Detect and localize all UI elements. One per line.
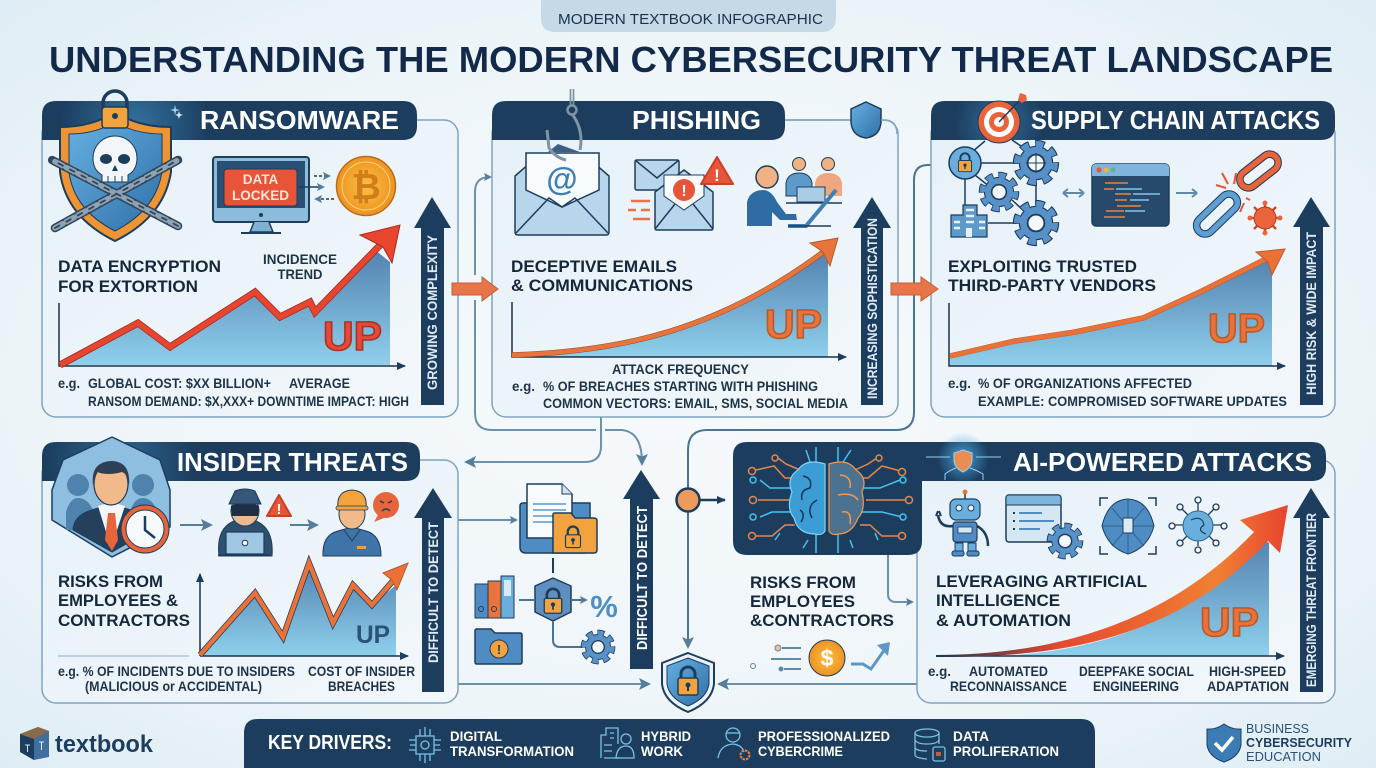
text: risks from employees and contractors centre: &CONTRACTORS	[750, 611, 894, 630]
heading: key drivers: KEY DRIVERS:	[268, 732, 392, 754]
text: supply chain examples: EXAMPLE: COMPROMISED SOFTWARE UPDATES	[978, 393, 1287, 409]
text: data encryption for extortion: DATA ENCRYPTION	[58, 257, 221, 276]
text: ai examples: HIGH-SPEED	[1209, 663, 1286, 679]
text: leveraging ai	[936, 572, 1147, 630]
arrow: code to broken link	[1176, 189, 1197, 197]
icon: bitcoin coin: ₿	[351, 166, 381, 207]
icon: lock shield with links	[519, 578, 586, 647]
icon: binders	[475, 576, 514, 618]
chart: ransomware incidence trend: TREND	[278, 266, 322, 282]
text: ai examples: DEEPFAKE SOCIAL	[1079, 663, 1194, 679]
text: leveraging ai: LEVERAGING ARTIFICIAL	[936, 572, 1147, 591]
icon: circuit brain	[748, 447, 912, 553]
text: ai examples: e.g.	[928, 663, 951, 679]
arrow: difficult to detect	[414, 488, 452, 692]
icon: gear	[584, 633, 612, 661]
text: supply chain examples: e.g.	[948, 375, 971, 391]
arrow: high risk and wide impact	[1293, 197, 1330, 405]
icon: envelope on fishing hook	[515, 89, 609, 235]
icon: virus	[1248, 200, 1282, 236]
text: ransomware examples	[58, 375, 409, 409]
icon: central shield lock	[662, 653, 714, 712]
text: risks from employees and contractors centre: RISKS FROM	[750, 573, 856, 592]
icon: documents and locked folder	[520, 484, 597, 553]
logo: textbook: textbook	[55, 731, 154, 758]
arrow: emerging threat frontier	[1293, 488, 1330, 692]
icon: cost trend with coin: $	[821, 645, 834, 671]
text: digital transformation	[450, 729, 574, 759]
icon: neural network sphere	[1169, 497, 1227, 553]
text: hybrid work	[641, 729, 691, 759]
icon: code window	[1092, 164, 1169, 226]
heading: ai-powered attacks: AI-POWERED ATTACKS	[1013, 447, 1312, 477]
panel: phishing	[492, 89, 898, 417]
text: ai examples: ADAPTATION	[1207, 678, 1289, 694]
text: risks from employees: EMPLOYEES &	[58, 591, 178, 610]
icon: alert emails: !	[681, 183, 687, 200]
panel: insider threats	[41, 436, 459, 704]
chart: attack frequency	[512, 238, 846, 377]
icon: glowing shield	[926, 432, 1001, 484]
arrow: increasing sophistication	[853, 197, 891, 405]
chart: ai attack growth	[936, 505, 1288, 657]
badge: modern textbook infographic	[541, 0, 836, 32]
text: supply chain examples	[948, 375, 1287, 409]
text: insider examples: (MALICIOUS or ACCIDENTAL)	[85, 678, 262, 694]
arrow: phishing to supply chain	[891, 277, 938, 301]
icon: data locked monitor	[213, 157, 334, 233]
panel: supply chain attacks	[931, 77, 1335, 417]
chart: attack frequency: UP	[765, 301, 822, 347]
chart: supply chain trend	[949, 249, 1285, 366]
icon: database	[915, 729, 945, 761]
arrow: employee to hacker	[180, 524, 210, 526]
icon: hacker with laptop	[218, 489, 272, 556]
icon: alert emails: !	[714, 166, 720, 185]
text: deceptive emails: & COMMUNICATIONS	[511, 276, 693, 295]
chart: insider incidents: UP	[356, 621, 390, 649]
icon: robot	[936, 490, 988, 556]
icon: percent sign: %	[590, 589, 618, 624]
text: leveraging ai: INTELLIGENCE	[936, 591, 1060, 610]
text: ransomware examples: AVERAGE	[289, 375, 350, 391]
chart: ransomware incidence trend	[59, 225, 405, 366]
heading: phishing: PHISHING	[632, 105, 761, 135]
text: risks from employees and contractors centre: EMPLOYEES	[750, 592, 855, 611]
icon: hybrid work	[601, 728, 634, 758]
text: ransomware examples: e.g.	[58, 375, 80, 391]
icon: alert emails	[628, 157, 733, 230]
text: professionalized cybercrime: PROFESSIONALIZED	[758, 729, 890, 744]
text: phishing examples: e.g.	[512, 378, 535, 394]
arrow: growing complexity: GROWING COMPLEXITY	[424, 234, 440, 390]
icon: warning triangle	[267, 495, 291, 518]
icon: warning folder	[475, 629, 522, 664]
icon: data locked monitor: DATA	[243, 172, 278, 187]
title: UNDERSTANDING THE MODERN CYBERSECURITY THREAT LANDSCAPE	[49, 39, 1333, 80]
icon: professional cybercriminal	[718, 728, 750, 760]
text: hybrid work: HYBRID	[641, 729, 691, 744]
chart: supply chain trend: UP	[1208, 305, 1265, 351]
text: supply chain examples: % OF ORGANIZATIONS AFFECTED	[978, 375, 1192, 391]
arrow: difficult to detect centre	[623, 470, 660, 669]
text: ai examples	[928, 663, 1289, 694]
icon: envelope on fishing hook: @	[546, 161, 578, 197]
text: phishing examples	[512, 378, 848, 411]
text: data encryption for extortion: FOR EXTORTION	[58, 277, 198, 296]
icon: warning triangle: !	[276, 501, 282, 518]
text: professionalized cybercrime: CYBERCRIME	[758, 744, 843, 759]
text: exploiting trusted vendors	[948, 257, 1156, 295]
arrow: increasing sophistication: INCREASING SOPHISTICATION	[864, 218, 880, 399]
panel: ai-powered attacks	[733, 432, 1335, 703]
icon: digital chip	[409, 727, 441, 763]
arrow: high risk and wide impact: HIGH RISK & WIDE IMPACT	[1303, 232, 1319, 395]
text: risks from employees: RISKS FROM	[58, 572, 163, 591]
text: phishing examples: % OF BREACHES STARTING WITH PHISHING	[543, 378, 818, 394]
arrow: hacker to worker	[290, 524, 316, 526]
connector lines between panels	[458, 165, 931, 684]
chart: attack frequency: ATTACK FREQUENCY	[612, 361, 750, 377]
text: digital transformation: DIGITAL	[450, 729, 502, 744]
icon: deepfake face scan	[1100, 498, 1156, 554]
badge: modern textbook infographic: MODERN TEXTBOOK INFOGRAPHIC	[558, 11, 823, 28]
text: ransomware examples: RANSOM DEMAND: $X,XXX+ DOWNTIME IMPACT: HIGH	[88, 393, 409, 409]
logo: business cybersecurity education	[1207, 721, 1352, 764]
panel: key drivers bar	[244, 719, 1095, 768]
icon: broken chain link	[1193, 151, 1282, 237]
icon: warning folder: !	[497, 642, 501, 657]
text: risks from employees and contractors centre	[750, 573, 894, 630]
icon: data locked monitor: LOCKED	[232, 188, 289, 203]
logo: business cybersecurity education: CYBERSECURITY	[1246, 735, 1352, 750]
arrow: double-headed link	[1063, 189, 1084, 197]
chart: ai attack growth: UP	[1200, 599, 1259, 645]
text: data proliferation: PROLIFERATION	[953, 744, 1059, 759]
text: hybrid work: WORK	[641, 744, 683, 759]
text: insider examples: e.g. % OF INCIDENTS DUE TO INSIDERS	[58, 663, 295, 679]
text: risks from employees: CONTRACTORS	[58, 611, 190, 630]
text: ai examples: RECONNAISSANCE	[950, 678, 1067, 694]
chart: ransomware incidence trend: INCIDENCE	[263, 251, 337, 267]
icon: people at laptops	[747, 158, 842, 226]
text: deceptive emails	[511, 257, 693, 295]
chart: insider incidents	[200, 563, 408, 656]
text: professionalized cybercrime	[758, 729, 890, 759]
icon: bitcoin coin	[336, 156, 396, 216]
icon: cost trend with coin	[750, 640, 890, 676]
icon: employee badge with clock	[52, 437, 170, 557]
icon: small shield	[851, 102, 881, 138]
logo: business cybersecurity education: BUSINESS	[1246, 721, 1309, 736]
panel: ransomware	[42, 50, 458, 417]
text: ai examples: AUTOMATED	[969, 663, 1048, 679]
arrow: ransomware to phishing	[452, 277, 498, 301]
logo: business cybersecurity education: EDUCATION	[1246, 749, 1321, 764]
text: leveraging ai: & AUTOMATION	[936, 611, 1071, 630]
icon: flow junction node	[676, 488, 700, 512]
icon: shield with skull and chains	[52, 91, 183, 241]
text: exploiting trusted vendors: THIRD-PARTY VENDORS	[948, 276, 1156, 295]
text: ai examples: ENGINEERING	[1093, 678, 1179, 694]
heading: ransomware: RANSOMWARE	[200, 105, 399, 135]
text: data encryption for extortion	[58, 257, 221, 296]
heading: supply chain attacks: SUPPLY CHAIN ATTACKS	[1031, 105, 1320, 135]
text: insider examples: COST OF INSIDER	[308, 663, 415, 679]
text: risks from employees	[58, 572, 190, 630]
text: exploiting trusted vendors: EXPLOITING TRUSTED	[948, 257, 1137, 276]
arrow: growing complexity	[414, 197, 451, 405]
text: ransomware examples: GLOBAL COST: $XX BILLION+	[88, 375, 271, 391]
arrow: difficult to detect centre: DIFFICULT TO DETECT	[634, 506, 651, 650]
arrow: emerging threat frontier: EMERGING THREAT FRONTIER	[1303, 513, 1319, 687]
chart: ransomware incidence trend: UP	[323, 313, 382, 359]
icon: network with target	[949, 93, 1055, 242]
text: insider examples	[58, 663, 415, 694]
text: digital transformation: TRANSFORMATION	[450, 744, 574, 759]
logo: textbook	[20, 727, 154, 760]
text: insider examples: BREACHES	[328, 678, 395, 694]
heading: insider threats: INSIDER THREATS	[177, 447, 408, 477]
icon: browser with gear	[1006, 495, 1080, 556]
text: deceptive emails: DECEPTIVE EMAILS	[511, 257, 677, 276]
arrow: difficult to detect: DIFFICULT TO DETECT	[425, 522, 441, 663]
icon: worker with angry speech bubble	[323, 490, 399, 556]
text: data proliferation	[953, 729, 1059, 759]
text: data proliferation: DATA	[953, 729, 989, 744]
text: phishing examples: COMMON VECTORS: EMAIL, SMS, SOCIAL MEDIA	[543, 395, 848, 411]
